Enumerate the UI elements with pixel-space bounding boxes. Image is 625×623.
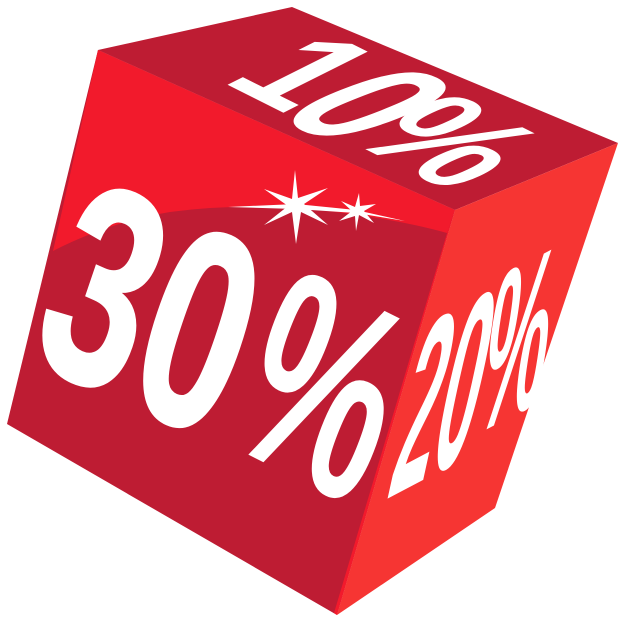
- label: 20%: 20: [373, 232, 517, 554]
- right face of cube: [337, 143, 618, 615]
- small sparkle: [339, 193, 376, 231]
- label: 20%: [373, 195, 571, 554]
- label: 20%: %: [466, 195, 571, 486]
- edge highlight: [334, 210, 455, 615]
- light streak: [228, 204, 405, 221]
- sparkle highlights: [228, 170, 405, 244]
- label: 30%: [7, 119, 446, 564]
- glossy highlight band: [53, 50, 455, 251]
- label: 10%: 1: [187, 14, 421, 131]
- left face of cube: [7, 50, 455, 615]
- label: 30%: 30: [7, 119, 296, 499]
- label: 30%: %: [202, 210, 446, 564]
- large sparkle: [264, 170, 328, 244]
- label: 10%: [187, 14, 588, 207]
- top face of cube: [98, 7, 618, 210]
- label: 10%: %: [313, 75, 588, 207]
- label: 10%: 0: [230, 46, 509, 163]
